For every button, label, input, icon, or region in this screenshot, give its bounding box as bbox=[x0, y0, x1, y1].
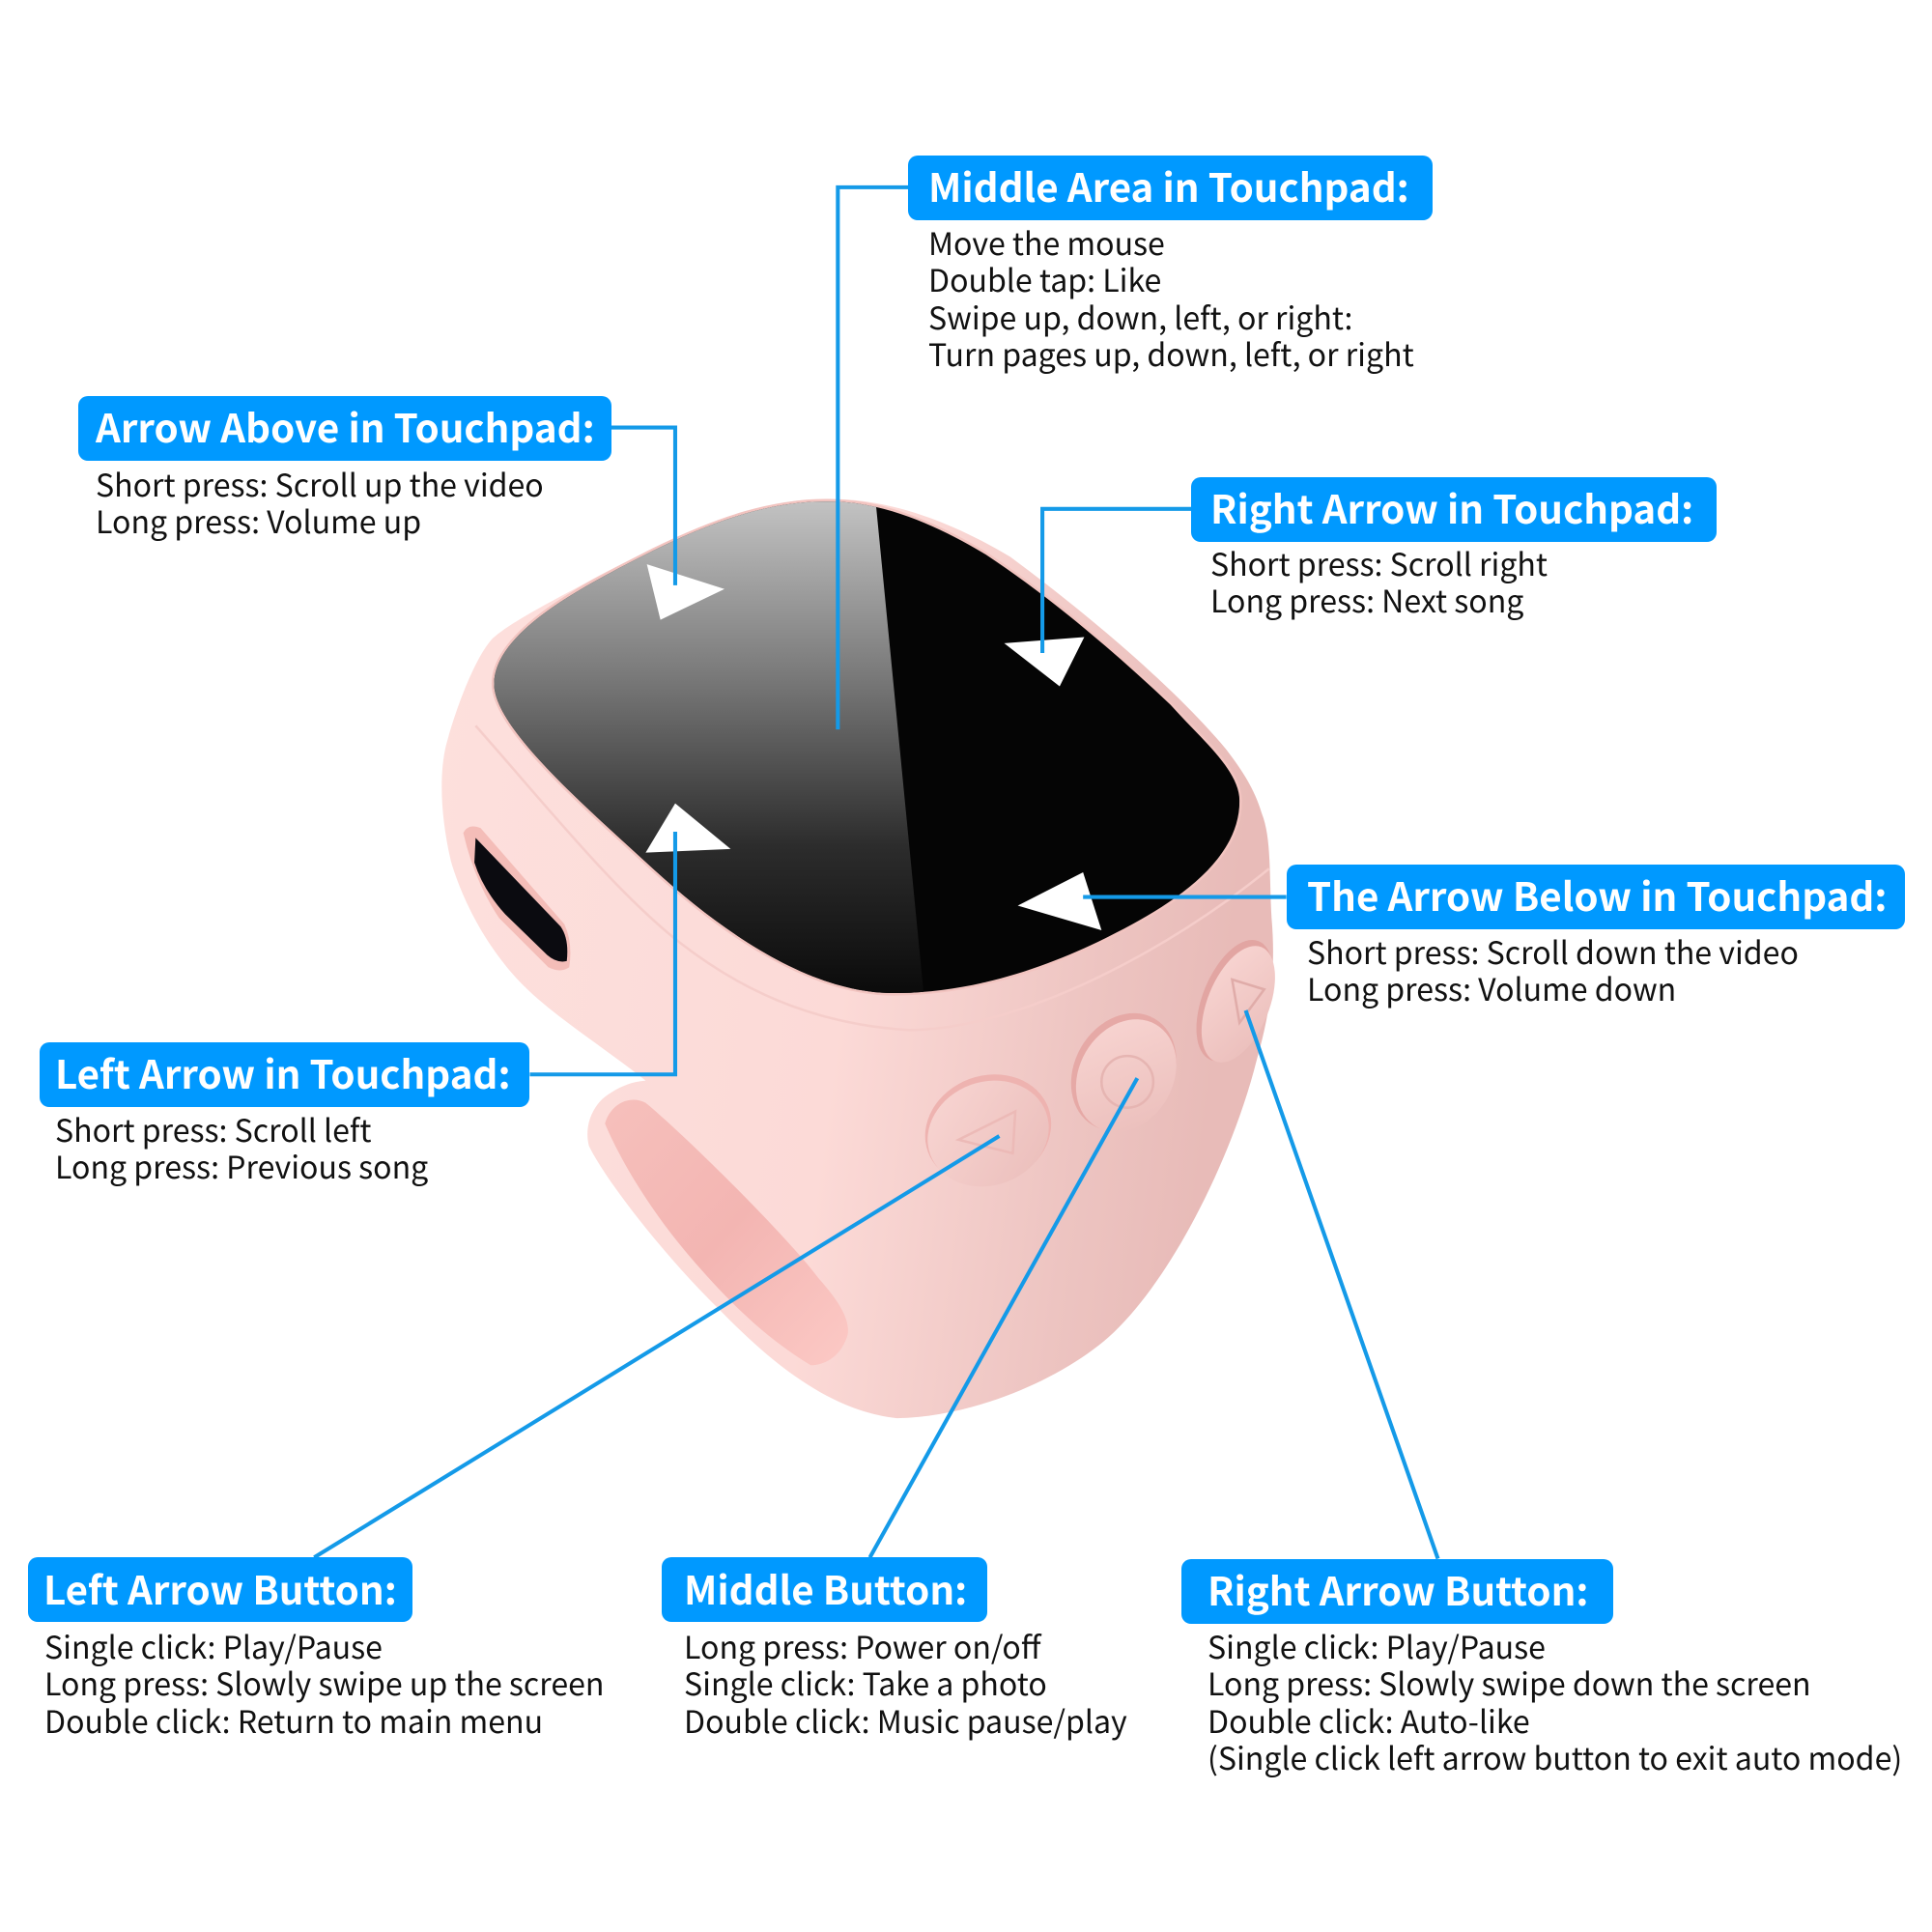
callout line: middle button bbox=[870, 1078, 1137, 1557]
rim groove bbox=[475, 725, 1269, 1030]
text: Left Arrow Button details: Single click: Play/Pause bbox=[44, 1624, 383, 1668]
callout line: arrow below bbox=[1083, 895, 1287, 898]
text: Right Arrow Button details: Double click: Auto-like bbox=[1208, 1698, 1530, 1743]
heading: Right Arrow Button: Right Arrow Button: bbox=[1208, 1560, 1589, 1617]
illustration: ring remote device with callout lines bbox=[313, 185, 1439, 1559]
ring band interior bbox=[605, 1100, 848, 1365]
text: Arrow Above details: Long press: Volume up bbox=[96, 498, 421, 543]
arrow marker: left bbox=[645, 804, 730, 853]
text: Right Arrow Button details: Single click: Play/Pause bbox=[1208, 1624, 1546, 1668]
text: Middle Button details bbox=[684, 1624, 1127, 1743]
heading: Left Arrow Button: Left Arrow Button: bbox=[43, 1559, 397, 1616]
heading: Middle Area in Touchpad: Middle Area in Touchpad: bbox=[928, 156, 1409, 213]
callout line: right arrow button bbox=[1246, 1010, 1438, 1559]
text: Right Arrow Button details: Long press: Slowly swipe down the screen bbox=[1208, 1661, 1811, 1705]
text: Arrow Below details: Long press: Volume down bbox=[1307, 966, 1676, 1010]
heading: Right Arrow in Touchpad: Right Arrow in Touchpad: bbox=[1210, 478, 1693, 535]
text: Left Arrow details bbox=[55, 1107, 428, 1188]
text: Left Arrow Button details: Double click: Return to main menu bbox=[44, 1698, 543, 1743]
text: Left Arrow details: Short press: Scroll left bbox=[55, 1107, 371, 1151]
text: Arrow Above details bbox=[96, 462, 544, 543]
heading: Middle Button: Middle Button: bbox=[684, 1559, 967, 1616]
device body with ring band bbox=[441, 498, 1273, 1418]
text: Middle Button details: Long press: Power on/off bbox=[684, 1624, 1040, 1668]
arrow marker: up bbox=[647, 564, 724, 620]
text: Right Arrow Button details bbox=[1208, 1624, 1902, 1779]
text: Arrow Below details bbox=[1307, 929, 1799, 1010]
text: Left Arrow Button details bbox=[44, 1624, 605, 1743]
arrow marker: right bbox=[1005, 637, 1084, 686]
touchpad screen bbox=[492, 498, 1242, 995]
callout line: left arrow button bbox=[314, 1136, 999, 1557]
text: Middle Button details: Double click: Music pause/play bbox=[684, 1698, 1127, 1743]
text: Right Arrow details: Short press: Scroll right bbox=[1210, 541, 1548, 585]
text: Right Arrow details: Long press: Next song bbox=[1210, 578, 1523, 622]
text: Middle Area details: Swipe up, down, left, or right: bbox=[928, 295, 1352, 339]
text: Middle Area details bbox=[928, 220, 1414, 376]
text: Middle Button details: Single click: Take a photo bbox=[684, 1661, 1047, 1705]
side port bbox=[464, 826, 570, 970]
callout line: left arrow bbox=[529, 832, 675, 1074]
button: middle bbox=[1050, 994, 1197, 1151]
text: Right Arrow details bbox=[1210, 541, 1548, 622]
text: Left Arrow details: Long press: Previous song bbox=[55, 1144, 428, 1188]
callout line: arrow above bbox=[611, 428, 675, 585]
text: Arrow Below details: Short press: Scroll down the video bbox=[1307, 929, 1799, 974]
text: Right Arrow Button details: (Single click left arrow button to exit auto mode) bbox=[1208, 1735, 1902, 1779]
text: Arrow Above details: Short press: Scroll up the video bbox=[96, 462, 544, 506]
heading: Arrow Above in Touchpad: Arrow Above in Touchpad: bbox=[96, 397, 595, 454]
text: Middle Area details: Move the mouse bbox=[928, 220, 1165, 265]
text: Middle Area details: Turn pages up, down, left, or right bbox=[928, 331, 1414, 376]
callout line: right arrow bbox=[1042, 509, 1191, 653]
arrow marker: down bbox=[1018, 872, 1101, 930]
heading: The Arrow Below in Touchpad: The Arrow Below in Touchpad: bbox=[1307, 866, 1887, 923]
heading: Left Arrow in Touchpad: Left Arrow in Touchpad: bbox=[55, 1043, 511, 1100]
text: Left Arrow Button details: Long press: Slowly swipe up the screen bbox=[44, 1661, 605, 1705]
text: Middle Area details: Double tap: Like bbox=[928, 257, 1161, 301]
callout line: middle area bbox=[838, 187, 908, 729]
button: left arrow bbox=[909, 1057, 1066, 1204]
button: right arrow bbox=[1180, 929, 1290, 1073]
